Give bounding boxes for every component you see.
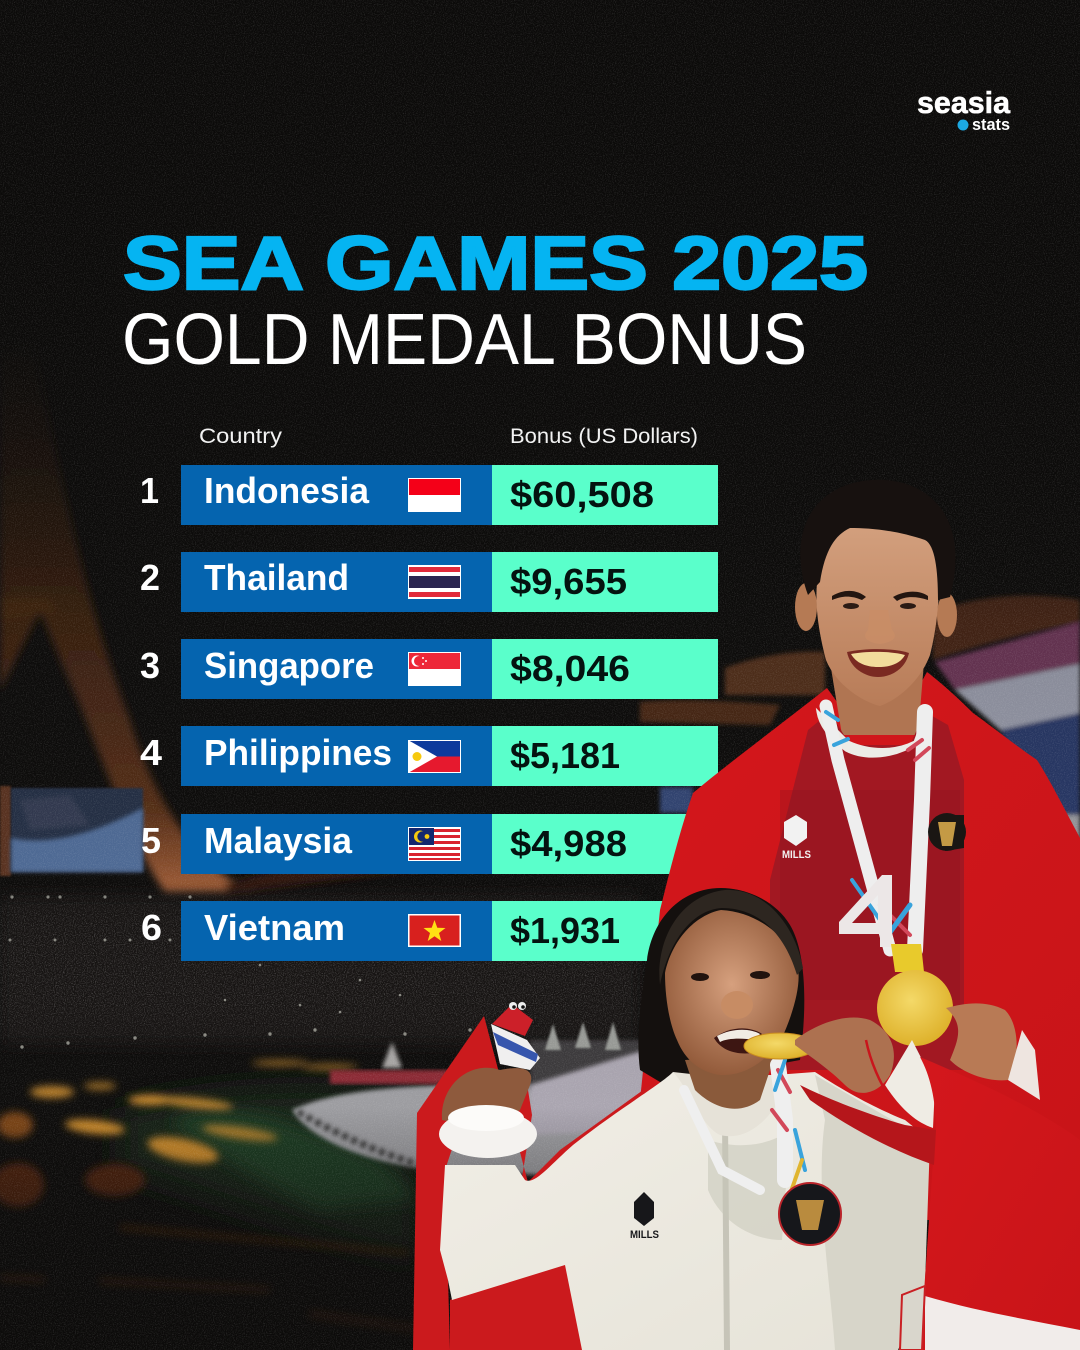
row 1: Indonesia: $60,508 xyxy=(510,474,654,515)
flag: Philippines xyxy=(408,740,461,773)
row 1: Indonesia: 1 xyxy=(140,470,159,511)
column headers: Country xyxy=(199,425,283,448)
jacket logo: MILLS xyxy=(630,1229,659,1241)
zip xyxy=(725,1120,727,1350)
jacket sleeve xyxy=(885,1040,935,1128)
white flag band xyxy=(925,1296,1080,1350)
face xyxy=(665,910,799,1075)
bitten gold medal xyxy=(744,1033,816,1059)
row 3: Singapore xyxy=(140,639,718,699)
flag: Singapore xyxy=(408,652,461,686)
row 3: Singapore: Singapore xyxy=(204,645,374,686)
crowd haze xyxy=(0,895,640,1045)
orange field lights xyxy=(0,1060,358,1207)
logo: seasia stats: seasia xyxy=(917,85,1011,120)
row 2: Thailand: $9,655 xyxy=(510,561,627,602)
jersey number 4 xyxy=(839,875,892,947)
jacket logo xyxy=(630,1192,659,1241)
far right roof and Thai flag banner xyxy=(640,596,1080,855)
lanyard xyxy=(826,706,929,950)
row 1: Indonesia: Indonesia xyxy=(204,470,370,511)
collar xyxy=(818,712,925,756)
eyes and brows xyxy=(832,591,928,609)
hair xyxy=(800,480,955,600)
jersey xyxy=(770,712,964,1070)
streaks foreground xyxy=(0,1225,419,1333)
arena field xyxy=(120,1088,420,1260)
raised left hand xyxy=(442,1068,531,1130)
jacket collar shade xyxy=(708,1130,790,1240)
neck xyxy=(685,1055,775,1109)
red string xyxy=(866,1040,892,1100)
flag: Thailand xyxy=(408,565,461,599)
ceremony stage xyxy=(292,1022,645,1180)
hand xyxy=(946,1003,1017,1080)
eyes xyxy=(691,971,770,981)
row 6: Vietnam: Vietnam xyxy=(204,907,345,948)
row 1: Indonesia xyxy=(140,465,718,525)
left cape xyxy=(413,1016,650,1350)
row 6: Vietnam: 6 xyxy=(141,907,162,948)
title line 1: SEA GAMES 2025 xyxy=(123,221,868,305)
row 2: Thailand xyxy=(140,552,718,612)
row 4: Philippines xyxy=(140,726,718,786)
gold medal xyxy=(877,970,953,1046)
mouth xyxy=(714,1028,762,1053)
jacket badge xyxy=(779,1183,841,1245)
athlete: man with Indonesian flag xyxy=(640,480,1080,1220)
row 2: Thailand: 2 xyxy=(140,557,160,598)
title line 2: GOLD MEDAL BONUS xyxy=(122,300,807,380)
flag: Indonesia xyxy=(408,478,461,512)
row 5: Malaysia xyxy=(141,814,718,874)
right cape red over arm xyxy=(800,1085,936,1165)
jersey badge xyxy=(928,813,966,851)
row 4: Philippines: 4 xyxy=(140,732,162,773)
row 6: Vietnam: $1,931 xyxy=(510,910,620,951)
column headers xyxy=(199,425,698,448)
row 4: Philippines: Philippines xyxy=(204,732,392,773)
patterned flag edge xyxy=(900,1286,925,1350)
sleeve xyxy=(1008,1030,1040,1100)
back hair xyxy=(638,888,804,1085)
row 5: Malaysia: 5 xyxy=(141,820,161,861)
flag: Vietnam xyxy=(408,914,461,947)
row 5: Malaysia: $4,988 xyxy=(510,823,627,864)
neck xyxy=(828,650,925,735)
lanyard xyxy=(684,1060,805,1200)
row 3: Singapore: 3 xyxy=(140,645,160,686)
ears xyxy=(795,583,957,637)
athlete: woman biting medal xyxy=(413,888,1080,1350)
face xyxy=(816,522,939,706)
row 6: Vietnam xyxy=(141,901,718,961)
column headers: Bonus (US Dollars) xyxy=(510,425,698,448)
row 5: Malaysia: Malaysia xyxy=(204,820,353,861)
jacket collar xyxy=(673,1072,785,1136)
mascot flag xyxy=(491,1002,540,1070)
row 4: Philippines: $5,181 xyxy=(510,735,620,776)
white trophy base xyxy=(439,1105,537,1158)
smile xyxy=(847,649,909,677)
jersey logo: MILLS xyxy=(782,849,811,861)
hair braids xyxy=(659,890,803,985)
jersey logo xyxy=(782,815,811,861)
title xyxy=(122,221,868,380)
red flag cape xyxy=(640,672,1080,1220)
nose xyxy=(865,610,895,644)
nose xyxy=(721,991,753,1019)
crowd speckle xyxy=(0,896,644,1037)
right cape xyxy=(920,1057,1080,1350)
video screen xyxy=(0,786,143,876)
right jacket patterned panel xyxy=(815,1075,930,1350)
stadium arch xyxy=(0,345,640,895)
row 2: Thailand: Thailand xyxy=(204,557,349,598)
flag: Malaysia xyxy=(408,827,461,861)
ranking table xyxy=(140,465,718,961)
medal ribbon holder xyxy=(891,944,924,972)
row 3: Singapore: $8,046 xyxy=(510,648,630,689)
logo: seasia stats: stats xyxy=(972,115,1010,134)
crowd lights xyxy=(8,895,472,1049)
jacket xyxy=(440,1072,930,1350)
right hand fist xyxy=(795,1018,894,1093)
